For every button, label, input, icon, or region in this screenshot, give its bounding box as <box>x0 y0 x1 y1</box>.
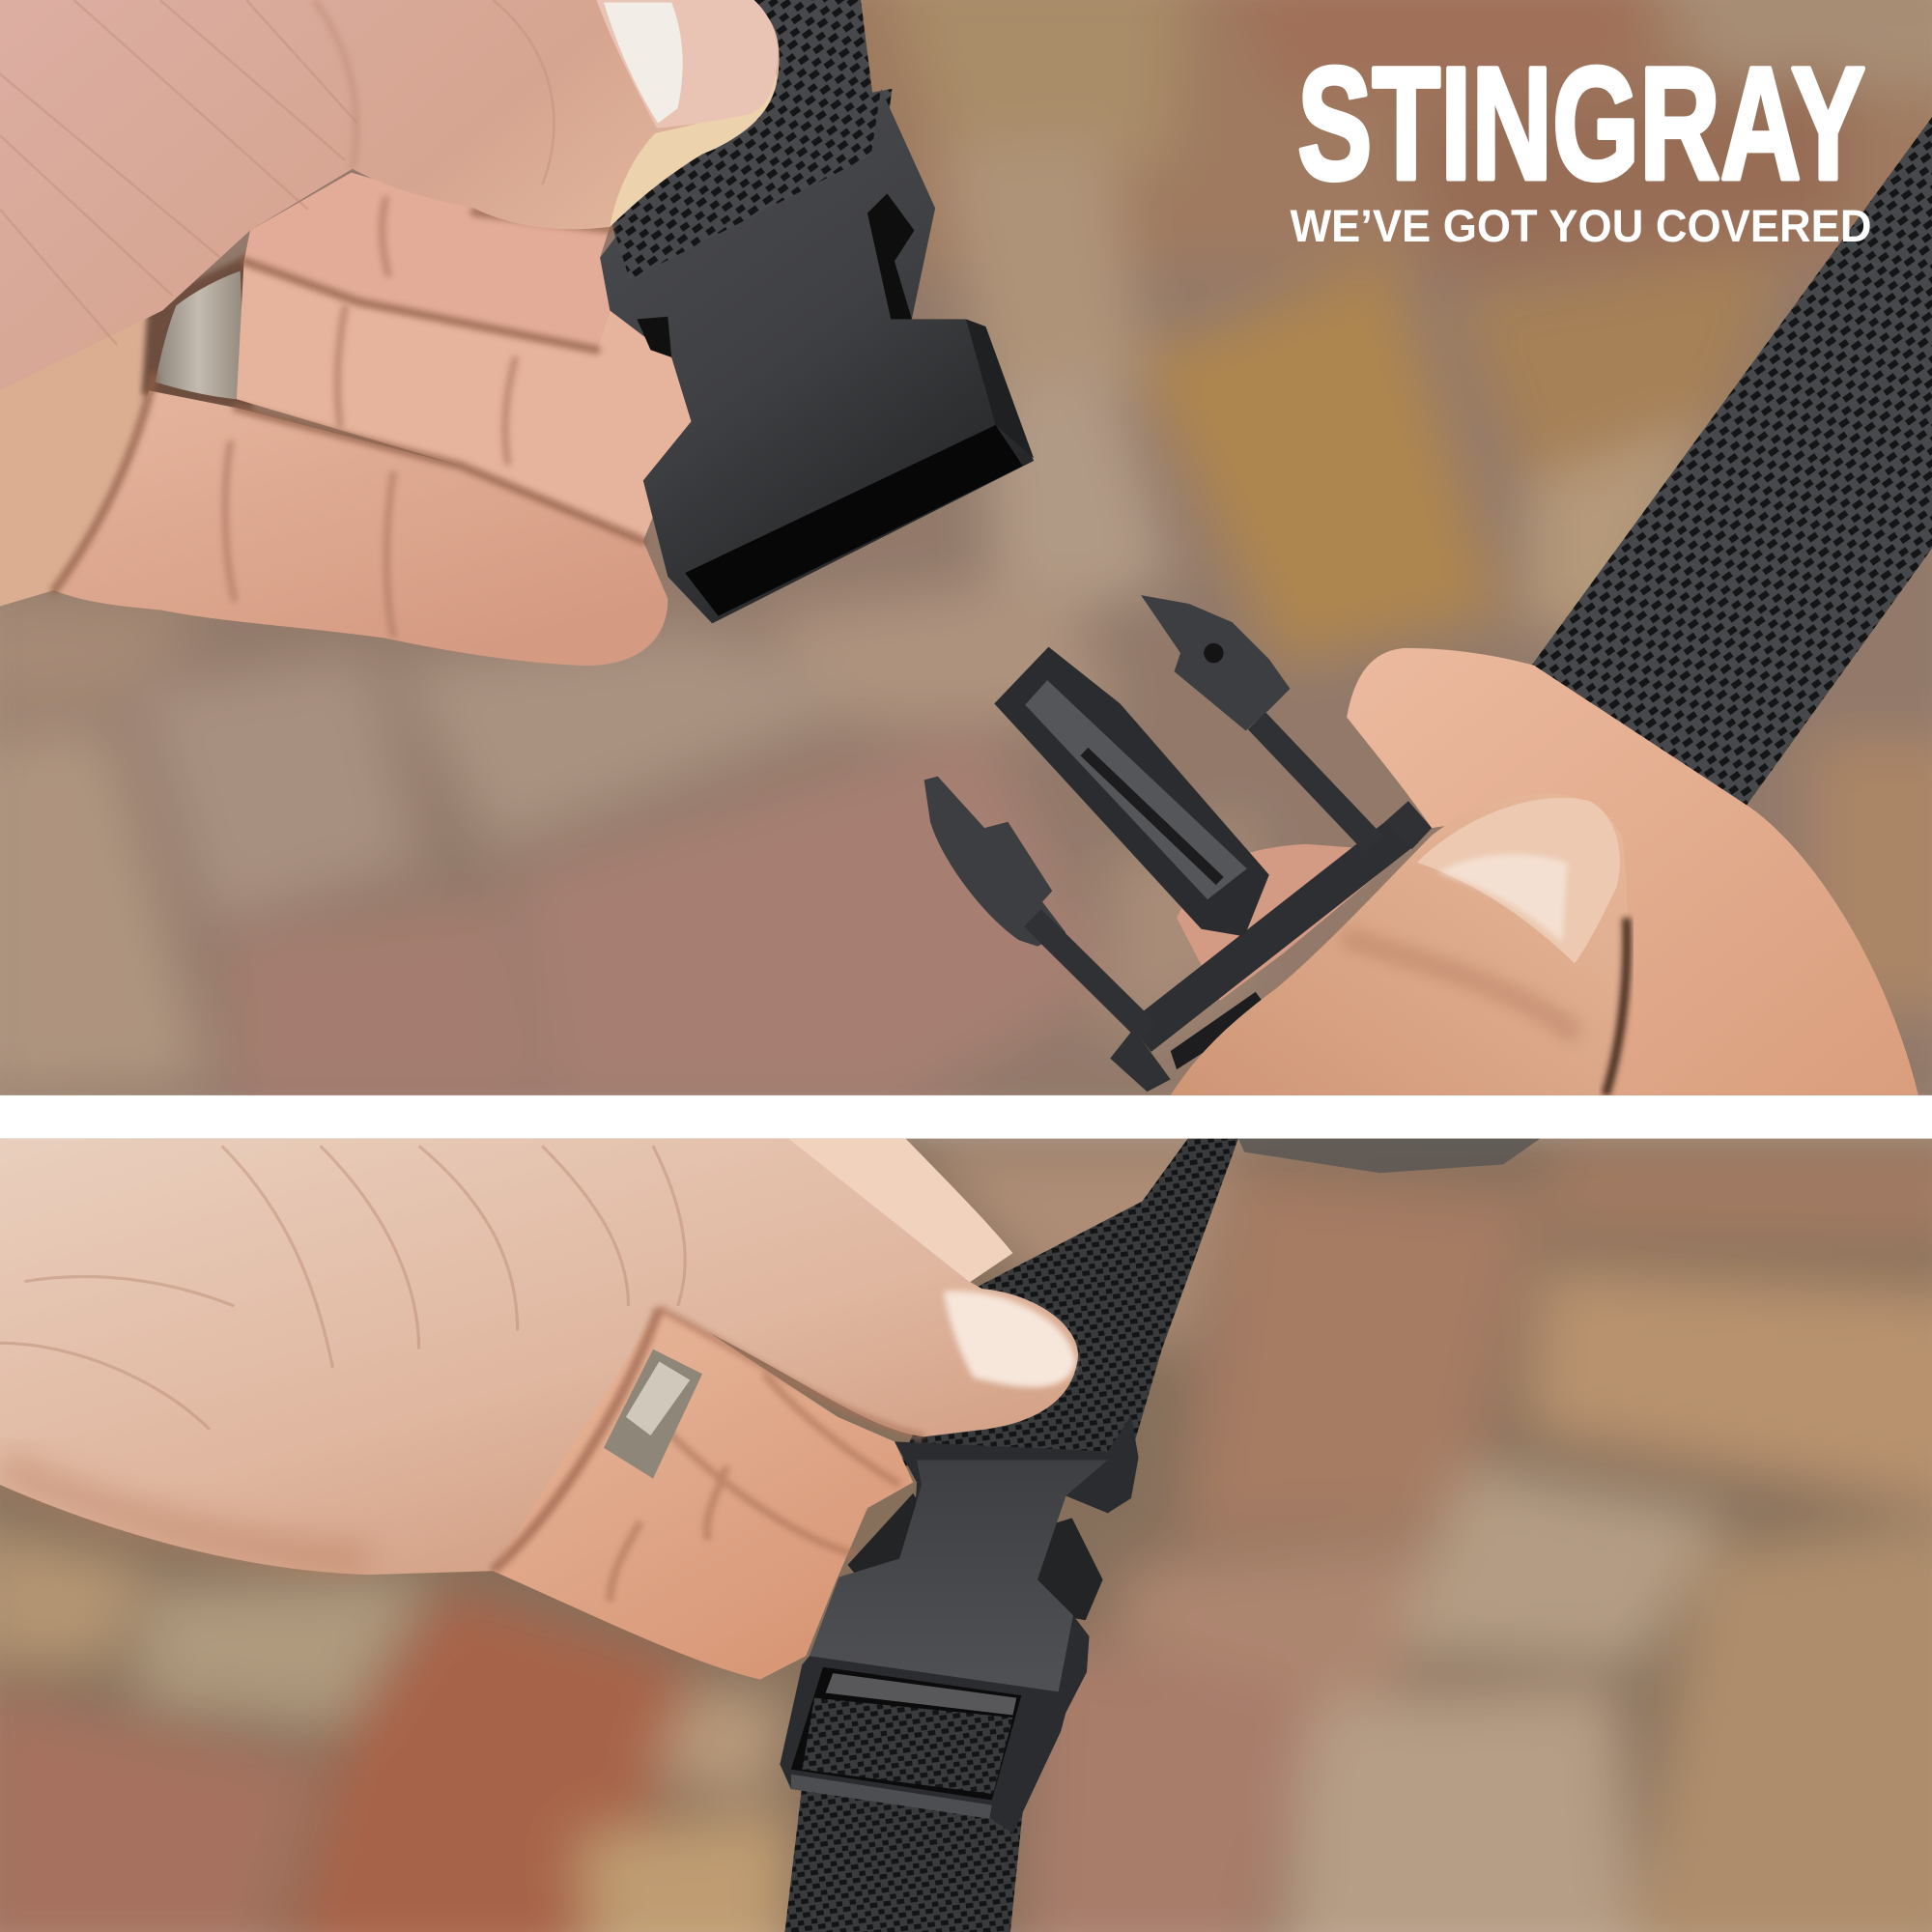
bottom hand <box>0 1139 1078 1575</box>
palm lines <box>0 1146 685 1430</box>
female buckle top <box>600 89 1034 623</box>
buckle window <box>791 1667 1021 1801</box>
blurred brick background, bottom <box>0 1109 1932 1932</box>
top strap <box>610 0 892 296</box>
buckle opening <box>685 425 1023 616</box>
ring <box>156 271 242 399</box>
finger separations <box>54 212 643 590</box>
thumb tip <box>610 74 777 227</box>
thumb <box>1171 793 1628 1095</box>
metal band <box>826 1673 1016 1716</box>
panel: top photo <box>0 0 1932 1146</box>
hand shading <box>493 1309 659 1571</box>
thumbnail white <box>604 3 683 124</box>
side clips <box>848 1493 1103 1620</box>
lower finger <box>54 390 668 666</box>
logo <box>1290 35 1872 252</box>
ring shadow <box>142 252 252 412</box>
palm skin lines <box>0 0 554 345</box>
end tab bottom <box>1110 1029 1171 1092</box>
left prong <box>924 777 1065 947</box>
middle finger <box>237 261 692 541</box>
left slot <box>637 317 671 357</box>
index finger <box>244 173 610 350</box>
top hand <box>0 0 780 666</box>
thumb crease <box>659 1309 924 1436</box>
thumb and finger gap <box>1605 918 1627 1095</box>
strap loop at top <box>1238 1139 1540 1173</box>
back finger <box>787 1139 1012 1284</box>
right hand <box>1171 648 1918 1095</box>
palm and thumb <box>0 0 780 321</box>
bottom thumbnail <box>944 1291 1076 1387</box>
knuckle creases <box>225 200 515 635</box>
buckle body <box>600 89 1034 623</box>
front face <box>810 1460 1108 1691</box>
centre guide <box>994 647 1269 936</box>
strap behind insert <box>1171 992 1269 1069</box>
palm to thumb shadow <box>314 0 356 169</box>
knuckle colouring <box>1343 936 1577 1035</box>
ring highlight <box>626 1361 690 1435</box>
skin behind insert <box>1177 844 1392 1001</box>
right prong <box>1141 595 1290 730</box>
blurred brick background, top <box>0 0 1932 1146</box>
webbing in window <box>802 1698 1012 1794</box>
upper strap <box>899 1139 1238 1466</box>
end tab top <box>1385 801 1432 849</box>
lower fingers <box>493 1300 913 1680</box>
bottom ring <box>604 1350 702 1479</box>
side slot <box>867 193 914 319</box>
right thumbnail <box>1417 798 1620 963</box>
right strap <box>1531 117 1932 810</box>
buckle body <box>780 1416 1139 1833</box>
tagline: WE’VE GOT YOU COVERED <box>1290 201 1871 252</box>
lower strap <box>784 1775 1023 1932</box>
crossbar <box>1140 828 1407 1037</box>
frame highlight <box>791 1775 992 1819</box>
thumbnail highlight <box>1438 854 1567 943</box>
female and male buckle closed <box>780 1416 1139 1833</box>
lower finger creases <box>610 1374 899 1602</box>
right side wall <box>966 319 1034 458</box>
little finger segment <box>0 317 151 607</box>
male buckle insert <box>924 595 1432 1092</box>
panel: bottom photo <box>0 1109 1932 1932</box>
palm and thumb <box>0 1139 1078 1575</box>
finger and palm <box>1347 648 1918 1095</box>
thumbnail <box>596 0 778 128</box>
